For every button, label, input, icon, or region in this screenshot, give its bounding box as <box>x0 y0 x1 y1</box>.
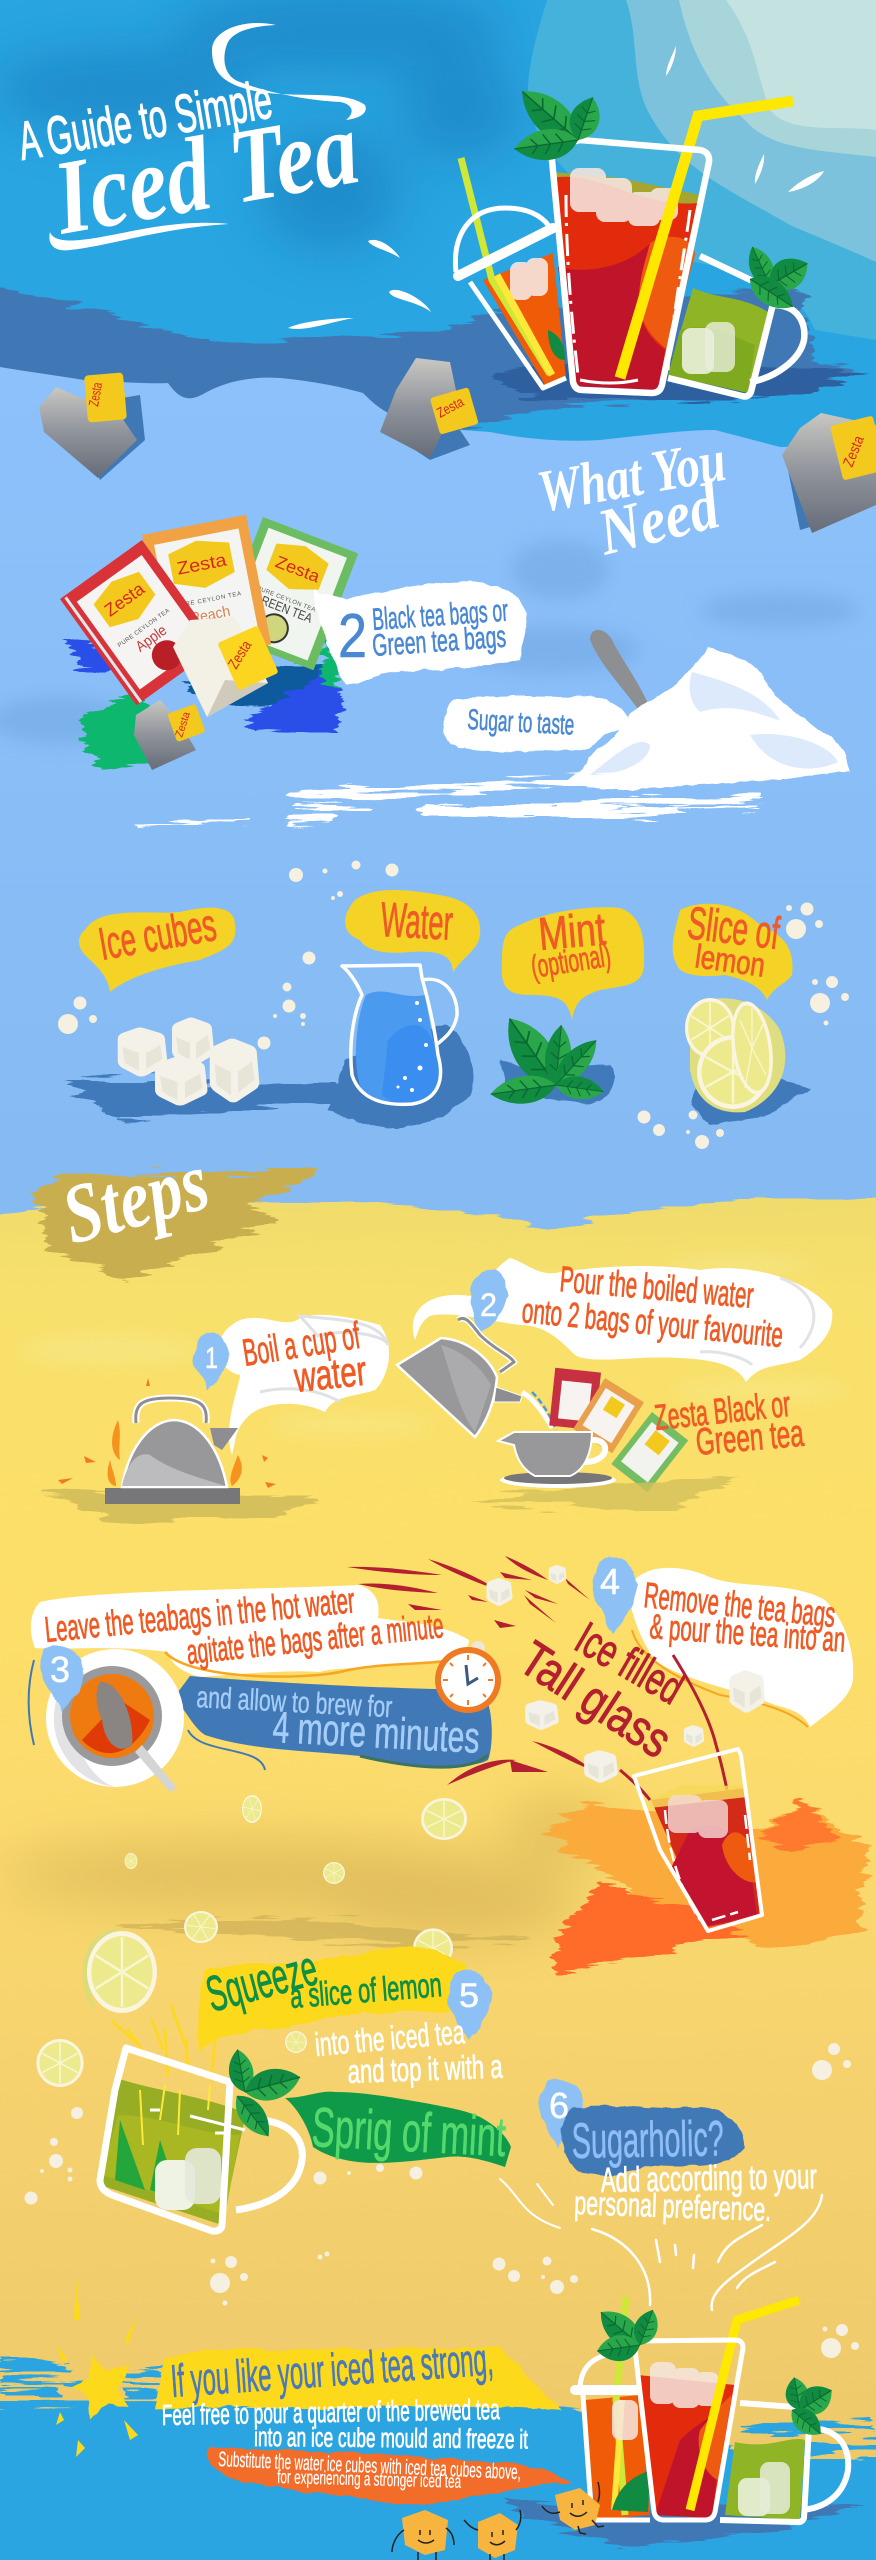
main title: Iced Tea <box>44 88 366 257</box>
mint leaves <box>489 1008 605 1108</box>
splash drops <box>288 46 824 329</box>
heading: what you need: Need <box>590 469 727 570</box>
paint splatter <box>67 636 344 768</box>
title swoosh <box>212 23 366 120</box>
step 1: boil water <box>40 1315 389 1520</box>
callout: sugar: Sugar to taste <box>467 704 575 742</box>
heading: steps: Steps <box>53 1135 218 1262</box>
ice filled tall glass lettering: Ice filled <box>567 1612 693 1714</box>
callout: tea bags: 2 <box>338 602 367 671</box>
small tea bag <box>134 700 206 770</box>
white callout <box>628 1568 853 1727</box>
callout: mint <box>502 902 644 1020</box>
number splash 4 <box>593 1557 637 1634</box>
callout: tea bags: Black tea bags or <box>371 593 509 637</box>
mug with lemon tea <box>100 2048 302 2231</box>
white text: Feel free to pour a quarter of the brewed tea <box>162 2394 501 2432</box>
peach tea box: Peach <box>189 603 232 627</box>
callout: water <box>345 890 480 972</box>
mint sprig left <box>511 79 606 164</box>
teacup top view <box>46 1649 184 1792</box>
lemon slices <box>685 998 785 1112</box>
tea boxes <box>60 515 358 770</box>
number splash 1 <box>193 1333 229 1390</box>
brush shadow <box>62 1079 345 1118</box>
number splash 2 <box>469 1270 508 1333</box>
kettle <box>105 1398 240 1504</box>
yellow callout: Squeeze <box>200 1940 323 2023</box>
pour stream <box>620 1655 727 1800</box>
callout: ice cubes <box>79 898 235 992</box>
light blue field <box>0 367 876 1300</box>
spoon <box>590 630 650 712</box>
burner shadow <box>40 1490 320 1520</box>
cream droplets <box>24 860 859 2358</box>
apple tea box: Zesta <box>101 578 149 620</box>
mint sprig left <box>592 2302 663 2364</box>
apple tea box: PURE CEYLON TEA <box>117 608 171 649</box>
step 3: brew <box>29 1579 501 1792</box>
ice filled tall glass lettering: Tall glass <box>510 1630 681 1769</box>
ice cubes ingredient <box>62 898 345 1118</box>
callout: lemon <box>673 896 793 1000</box>
mint on mug <box>225 2047 304 2143</box>
number splash 1: 1 <box>205 1342 218 1375</box>
green tea box: Zesta <box>273 552 323 587</box>
title: A Guide to Simple Iced Tea <box>14 23 366 257</box>
character two <box>464 2510 521 2560</box>
tea bag center: Zesta <box>434 393 466 421</box>
white text <box>162 2394 529 2454</box>
small tea bag: Zesta <box>173 710 193 739</box>
tea bag left: Zesta <box>85 381 105 408</box>
yellow squeeze rays <box>113 2005 215 2080</box>
dark brush band <box>0 285 872 440</box>
steam callout <box>413 1258 832 1382</box>
instruction text: into the iced tea <box>313 2013 466 2063</box>
heading: steps <box>25 1135 318 1280</box>
mint callout: Sprig of mint <box>310 2095 508 2168</box>
tea bags floating <box>39 358 876 533</box>
white tea bag with tag: Zesta <box>225 637 256 672</box>
callout: tea bags <box>312 581 527 686</box>
blue callout: Sugarholic? <box>571 2110 724 2169</box>
callout: lemon: lemon <box>693 937 767 984</box>
yellow callout: a slice of lemon <box>289 1966 443 2016</box>
brush shadow <box>500 1060 614 1105</box>
white callout <box>31 1579 469 1677</box>
white swooshes <box>500 2179 822 2310</box>
tall red glass <box>550 101 793 393</box>
title underline <box>49 223 229 250</box>
sugar streaks <box>135 780 760 827</box>
white callout: Leave the teabags in the hot water <box>43 1579 356 1650</box>
tall glass with tea <box>634 1749 762 1931</box>
white callout: agitate the bags after a minute <box>185 1606 445 1672</box>
bottom blue field <box>0 2403 876 2560</box>
number splash 2: 2 <box>480 1287 497 1323</box>
number splash 3: 3 <box>50 1649 70 1690</box>
clock <box>435 1641 501 1713</box>
cup on saucer <box>470 1432 740 1510</box>
number splash 4: 4 <box>600 1561 620 1602</box>
steam callout <box>219 1315 389 1455</box>
yellow star <box>56 2277 138 2457</box>
callout: tea bags: Green tea bags <box>371 619 507 663</box>
steam callout: water <box>291 1347 369 1401</box>
flying lemon slices <box>36 1791 467 2087</box>
brush shadow <box>328 1025 473 1130</box>
yellow callout: If you like your iced tea strong, <box>169 2333 495 2407</box>
blue callout <box>562 2105 744 2176</box>
red streaks <box>347 1556 592 1785</box>
green mug <box>668 256 804 396</box>
lemon ingredient <box>673 896 810 1125</box>
orange callout <box>206 2448 573 2505</box>
heading: what you need: What You <box>533 427 730 525</box>
callout: water: Water <box>379 893 454 951</box>
step 2: pour water <box>397 1258 832 1510</box>
number splash 3 <box>40 1647 84 1712</box>
closing drinks illustration <box>500 2297 860 2545</box>
yellow callout <box>197 1940 466 2052</box>
green mug <box>720 2403 848 2522</box>
orange callout: Substitute the water ice cubes with iced tea cubes above, <box>218 2448 521 2484</box>
step 6: sugarholic <box>500 2080 822 2310</box>
kettle pouring <box>397 1318 522 1437</box>
mini tea boxes <box>549 1368 688 1492</box>
tea bag center <box>380 358 479 460</box>
sugar pile <box>564 646 849 790</box>
label: zesta tea: Green tea <box>694 1413 806 1464</box>
orange cup <box>575 2297 650 2520</box>
mint sprig right <box>742 242 815 317</box>
tea bag right: Zesta <box>840 433 868 469</box>
character one <box>392 2510 454 2560</box>
sugar pile with spoon <box>135 630 849 827</box>
apple tea box <box>60 540 218 705</box>
orange paint splash <box>540 1800 868 1975</box>
flames <box>58 1378 276 1488</box>
water ingredient <box>328 890 480 1130</box>
callout: mint: Mint <box>536 902 608 960</box>
number splash 5 <box>448 1971 492 2040</box>
label: zesta tea <box>653 1383 806 1464</box>
green tea box <box>218 517 358 670</box>
peach tea box <box>142 515 271 665</box>
instruction text <box>574 2157 817 2228</box>
step 4: pour into glass <box>347 1556 868 1975</box>
character three <box>542 2482 604 2534</box>
drinks illustration <box>455 79 872 402</box>
tall red glass <box>634 2300 799 2520</box>
green tea box: PURE CEYLON TEA <box>256 586 316 614</box>
tea bag left <box>39 372 145 480</box>
brush shadow <box>692 1078 810 1125</box>
number splash 6: 6 <box>549 2085 569 2126</box>
peach tea box: Zesta <box>175 549 229 579</box>
green tea box: GREEN TEA <box>251 590 315 626</box>
mint callout <box>285 2092 511 2168</box>
white text: into an ice cube mould and freeze it <box>254 2422 529 2454</box>
orange cup <box>455 158 566 388</box>
heading: what you need <box>533 427 730 570</box>
step 5: squeeze lemon <box>100 1940 511 2231</box>
tip: strong iced tea <box>56 2277 573 2505</box>
callout: lemon: Slice of <box>685 896 783 959</box>
yellow field <box>0 1194 876 2460</box>
instruction text: personal preference. <box>574 2184 772 2228</box>
steam callout: Boil a cup of <box>240 1315 363 1375</box>
jug <box>342 965 457 1104</box>
callout: mint: (optional) <box>528 937 613 985</box>
callout: sugar <box>444 696 630 752</box>
orange callout: for experiencing a stronger iced tea <box>277 2467 462 2493</box>
apple tea box: Apple <box>133 622 170 655</box>
blue callout: 4 more minutes <box>271 1703 481 1763</box>
instruction text <box>313 2013 504 2090</box>
subtitle: A Guide to Simple <box>14 70 276 172</box>
callout: ice cubes: Ice cubes <box>95 898 220 970</box>
mint sprig right <box>783 2376 839 2442</box>
blue callout <box>172 1676 492 1770</box>
number splash 6 <box>538 2080 584 2148</box>
mint ingredient <box>489 902 644 1108</box>
instruction text: and top it with a <box>347 2048 504 2090</box>
white tea bag with tag <box>173 617 279 717</box>
ice pile <box>118 1018 259 1106</box>
sugar cube characters <box>392 2482 604 2560</box>
peach tea box: PURE CEYLON TEA <box>176 591 242 610</box>
pour stream <box>522 1392 556 1430</box>
flying ice cubes <box>486 1565 765 1783</box>
tea bag right <box>782 413 876 533</box>
number splash 5: 5 <box>459 1977 479 2015</box>
blue callout: and allow to brew for <box>196 1681 393 1724</box>
yellow callout <box>156 2333 563 2410</box>
